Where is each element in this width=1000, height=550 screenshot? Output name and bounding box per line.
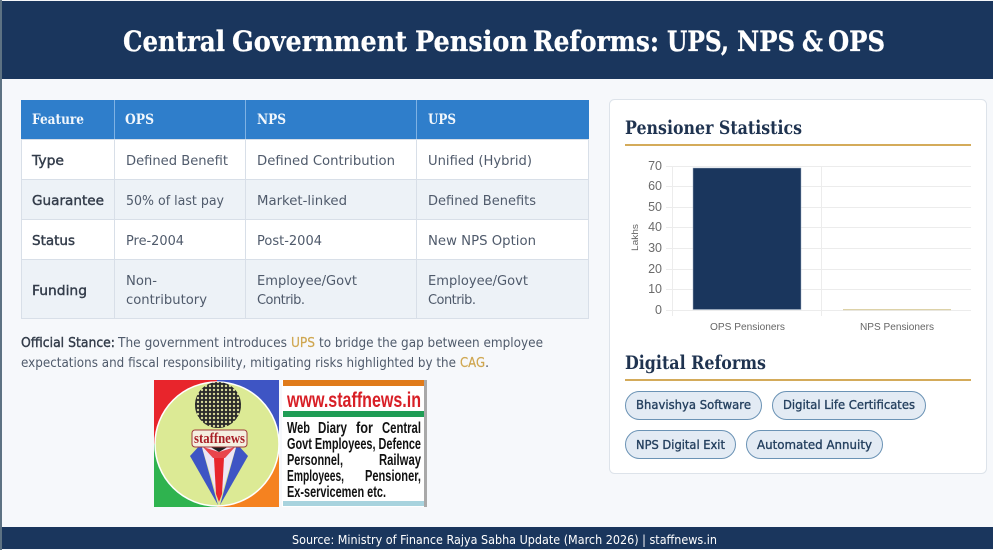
title: & [802, 25, 823, 58]
y axis labels: 40 [648, 220, 662, 234]
row: Funding: contributory [126, 292, 207, 308]
pill: Automated Annuity: Automated Annuity [757, 437, 873, 452]
table header row: OPS [125, 112, 154, 128]
row: Status: Post-2004 [257, 233, 322, 249]
title: NPS [737, 25, 795, 58]
y axis labels [648, 159, 662, 317]
row: Type: Defined Benefit [126, 153, 228, 169]
pill: Bhavishya Software [626, 392, 762, 420]
comparison table [21, 100, 589, 318]
pill: NPS Digital Exit: NPS Digital Exit [636, 437, 725, 452]
official stance text: Official Stance: [21, 336, 115, 351]
pill: Digital Life Certificates [772, 392, 926, 420]
official stance text: The government introduces [117, 336, 287, 351]
bar: OPS Pensioners [693, 168, 801, 310]
logo text panel: Central [382, 420, 421, 437]
logo text panel: Employees, [287, 468, 344, 485]
official stance text [21, 336, 543, 371]
y axis labels: 30 [648, 241, 662, 255]
official stance text: expectations and fiscal responsibility, mitigating risks highlighted by the [21, 356, 456, 371]
staffnews logo banner [154, 380, 427, 507]
logo text panel: www.staffnews.in [286, 389, 421, 412]
title: Central [123, 25, 225, 58]
bar chart [630, 159, 971, 333]
pill: Bhavishya Software: Bhavishya Software [636, 397, 751, 412]
y axis labels: 0 [655, 303, 662, 317]
row: Guarantee: 50% of last pay [126, 193, 224, 209]
official stance text: . [485, 356, 489, 371]
row: Funding: Contrib. [257, 293, 305, 308]
y axis title: Lakhs [630, 224, 641, 251]
bar: NPS Pensioners [843, 309, 951, 310]
table header row: UPS [428, 112, 456, 128]
x axis labels [710, 322, 934, 333]
row: Status: New NPS Option [428, 233, 536, 249]
header banner [2, 1, 993, 79]
logo text panel: Diary [318, 420, 347, 437]
row: Guarantee: Market-linked [257, 193, 347, 209]
row: Type: Defined Contribution [257, 153, 395, 169]
pill: Digital Life Certificates: Digital Life Certificates [783, 397, 915, 412]
row: Type: Unified (Hybrid) [428, 153, 532, 169]
logo text panel: Web [287, 420, 310, 437]
y axis labels: 60 [648, 179, 662, 193]
title: Pension [415, 25, 528, 58]
row: Type [21, 139, 589, 179]
staffnews tag: staffnews [194, 431, 245, 447]
title: Reforms: [533, 25, 659, 58]
footer [2, 527, 993, 549]
y axis labels: 70 [648, 159, 662, 173]
y axis labels: 10 [648, 282, 662, 296]
official stance text: CAG [460, 356, 485, 371]
row: Guarantee [21, 179, 589, 219]
row: Guarantee: Defined Benefits [428, 193, 536, 209]
row: Status [21, 219, 589, 259]
logo text panel: for [356, 420, 373, 437]
icon: suit and tie [190, 444, 248, 505]
source line: Source: Ministry of Finance Rajya Sabha Update (March 2026) | staffnews.in [292, 533, 717, 547]
row: Funding [21, 259, 589, 318]
row: Funding: Non- [126, 273, 157, 289]
logo text panel [282, 380, 427, 507]
row: Type: Type [31, 153, 64, 169]
logo text panel: Railway [379, 452, 421, 469]
icon: microphone head [195, 382, 241, 428]
row: Funding: Employee/Govt [257, 273, 357, 289]
y axis labels: 50 [648, 200, 662, 214]
title: OPS [828, 25, 885, 58]
y axis labels: 20 [648, 262, 662, 276]
title [123, 25, 885, 58]
row: Guarantee: Guarantee [32, 193, 104, 209]
row: Funding: Funding [32, 283, 87, 299]
table header row: Feature [32, 112, 84, 128]
row: Funding: Contrib. [428, 293, 476, 308]
table header row: NPS [257, 112, 286, 128]
row: Funding: Employee/Govt [428, 273, 528, 289]
title: UPS, [667, 25, 729, 58]
official stance text: to bridge the gap between employee [319, 336, 543, 351]
heading: Pensioner Statistics: Pensioner Statistics [625, 117, 802, 139]
pill: NPS Digital Exit [626, 430, 736, 458]
table header row [21, 100, 589, 139]
row: Status: Pre-2004 [126, 233, 184, 249]
logo text panel: Personnel, [287, 452, 343, 469]
panel: statistics and digital reforms [610, 100, 986, 474]
logo text panel: Ex-servicemen etc. [287, 484, 386, 501]
x axis labels: OPS Pensioners [710, 322, 785, 333]
official stance text: UPS [291, 336, 315, 351]
heading: Digital Reforms: Digital Reforms [625, 352, 766, 374]
logo emblem [154, 380, 279, 507]
logo text panel: Govt Employees, Defence [287, 436, 421, 453]
pill: Automated Annuity [746, 430, 882, 458]
title: Government [232, 25, 407, 58]
logo text panel: Pensioner, [365, 468, 421, 485]
x axis labels: NPS Pensioners [860, 322, 934, 333]
row: Status: Status [32, 233, 75, 249]
